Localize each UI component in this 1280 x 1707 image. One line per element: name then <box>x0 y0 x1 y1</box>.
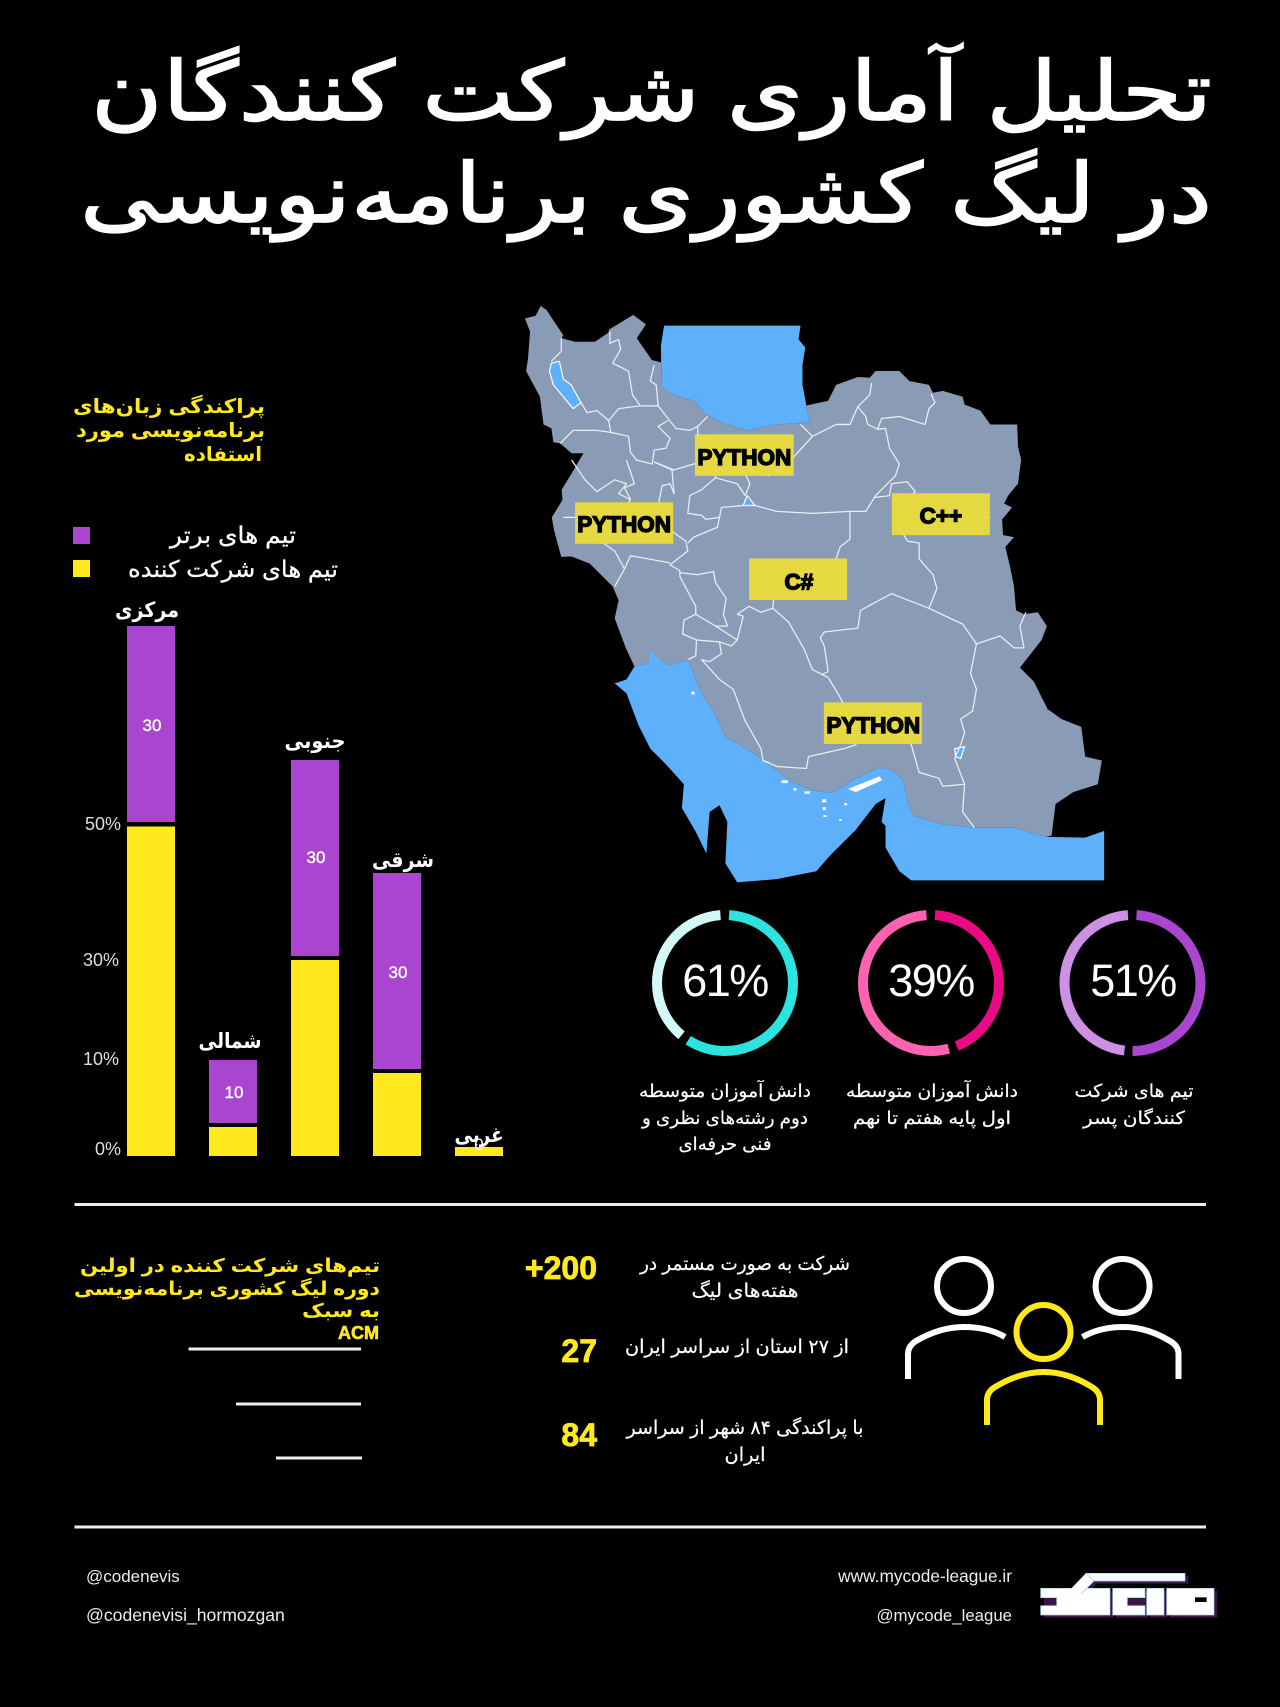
chart: axis labels <box>83 814 121 1159</box>
legend: تیم های برتر <box>169 522 296 549</box>
footer: right links <box>837 1566 1012 1625</box>
donut caption: 61 percent: دوم رشته‌های نظری و <box>641 1108 808 1129</box>
bar: west: غربی <box>454 1124 504 1147</box>
bar: south: جنوبی <box>284 730 346 753</box>
chart heading: پراکندگی زبان‌های <box>73 394 265 419</box>
stat: 27 provinces: 27 <box>561 1333 597 1369</box>
donut: 61 percent <box>657 915 793 1051</box>
bar chart <box>115 599 504 1156</box>
stats heading: تیم‌های شرکت کننده در اولین <box>80 1256 380 1277</box>
bar: east: 30 <box>389 963 407 982</box>
donut caption: 61 percent: دانش آموزان متوسطه <box>639 1079 811 1102</box>
stat: 200 plus <box>525 1250 850 1302</box>
map label: Python north: PYTHON <box>697 445 791 470</box>
stats heading: دوره لیگ کشوری برنامه‌نویسی <box>74 1277 380 1300</box>
title: در لیگ کشوری برنامه‌نویسی <box>80 148 1212 242</box>
map label: C++ east <box>892 493 990 535</box>
stat: 84 cities: 84 <box>561 1417 597 1453</box>
map label: Python north <box>695 434 794 476</box>
donut: 39 percent: 39% <box>888 955 974 1006</box>
stat: 200 plus: +200 <box>525 1250 597 1286</box>
donut caption: 39 percent <box>846 1079 1018 1129</box>
stat: 200 plus: شرکت به صورت مستمر در <box>639 1254 850 1275</box>
legend: تیم های شرکت کننده <box>128 556 338 583</box>
footer: left handles: @codenevisi_hormozgan <box>86 1605 285 1626</box>
bar: north: شمالی <box>198 1030 262 1053</box>
footer: right links: www.mycode-league.ir <box>837 1566 1012 1586</box>
chart heading: استفاده <box>184 444 262 466</box>
map label: Python south: PYTHON <box>826 713 920 738</box>
title: تحلیل آماری شرکت کنندگان <box>91 43 1212 140</box>
donut caption: 61 percent: فنی حرفه‌ای <box>678 1134 772 1155</box>
footer: right links: @mycode_league <box>876 1606 1012 1625</box>
map: Caspian Sea <box>661 326 810 430</box>
donut caption: 39 percent: اول پایه هفتم تا نهم <box>853 1108 1011 1129</box>
logo <box>1040 1572 1218 1618</box>
footer: left handles <box>86 1567 285 1626</box>
bar: north: 10 <box>225 1083 243 1102</box>
icon: people group <box>908 1259 1178 1425</box>
stats heading <box>74 1256 380 1343</box>
bar: west: 0 <box>474 1135 484 1154</box>
donut caption: 39 percent: دانش آموزان متوسطه <box>846 1079 1018 1102</box>
donut: 51 percent: 51% <box>1090 955 1176 1006</box>
map: province borders <box>551 332 1026 828</box>
donut caption: 51 percent <box>1074 1081 1194 1129</box>
bar: central: مرکزی <box>115 599 179 622</box>
donut: 51 percent <box>1064 915 1200 1051</box>
chart: axis labels: 50% <box>85 814 121 834</box>
footer: left handles: @codenevis <box>86 1567 180 1586</box>
map: land <box>525 306 1102 837</box>
chart heading <box>73 394 265 466</box>
map label: C# centre <box>749 558 847 600</box>
stats heading: ACM <box>338 1323 379 1343</box>
map: lakes <box>549 361 965 759</box>
bar: south <box>284 730 346 1156</box>
bar: east <box>372 849 434 1156</box>
chart: axis labels: 30% <box>83 950 119 970</box>
map label: Python west <box>575 502 673 544</box>
bar: west <box>454 1124 504 1156</box>
bar: central <box>115 599 179 1156</box>
map label: C++ east: C++ <box>920 503 962 528</box>
stats heading: به سبک <box>302 1301 380 1322</box>
stat: 27 provinces: از ۲۷ استان از سراسر ایران <box>625 1337 849 1358</box>
stat: 200 plus: هفته‌های لیگ <box>692 1280 798 1302</box>
chart: axis labels: 10% <box>83 1049 119 1069</box>
bar: central: 30 <box>143 716 161 735</box>
panel: map of Iran <box>525 306 1104 882</box>
map label: Python west: PYTHON <box>577 512 671 537</box>
chart: axis labels: 0% <box>95 1139 121 1159</box>
stat: 27 provinces <box>561 1333 849 1369</box>
bar: north <box>198 1030 262 1156</box>
legend <box>73 522 338 583</box>
bar: east: شرقی <box>372 849 434 872</box>
map: islands <box>691 692 882 821</box>
donut caption: 51 percent: کنندگان پسر <box>1082 1107 1185 1129</box>
chart heading: برنامه‌نویسی مورد <box>76 420 265 442</box>
title <box>80 43 1212 242</box>
stat: 84 cities: ایران <box>724 1445 766 1466</box>
donut caption: 61 percent <box>639 1079 811 1155</box>
bar: south: 30 <box>307 848 325 867</box>
map label: C# centre: C# <box>785 569 814 594</box>
donut caption: 51 percent: تیم های شرکت <box>1074 1081 1194 1102</box>
stat: 84 cities: با پراکندگی ۸۴ شهر از سراسر <box>625 1416 864 1439</box>
map label: Python south <box>824 702 922 744</box>
donut: 39 percent <box>863 915 999 1051</box>
stat: 84 cities <box>561 1416 864 1466</box>
donut: 61 percent: 61% <box>682 955 768 1006</box>
map: Persian Gulf and Sea of Oman <box>615 652 1104 882</box>
stat bars <box>188 1348 362 1460</box>
